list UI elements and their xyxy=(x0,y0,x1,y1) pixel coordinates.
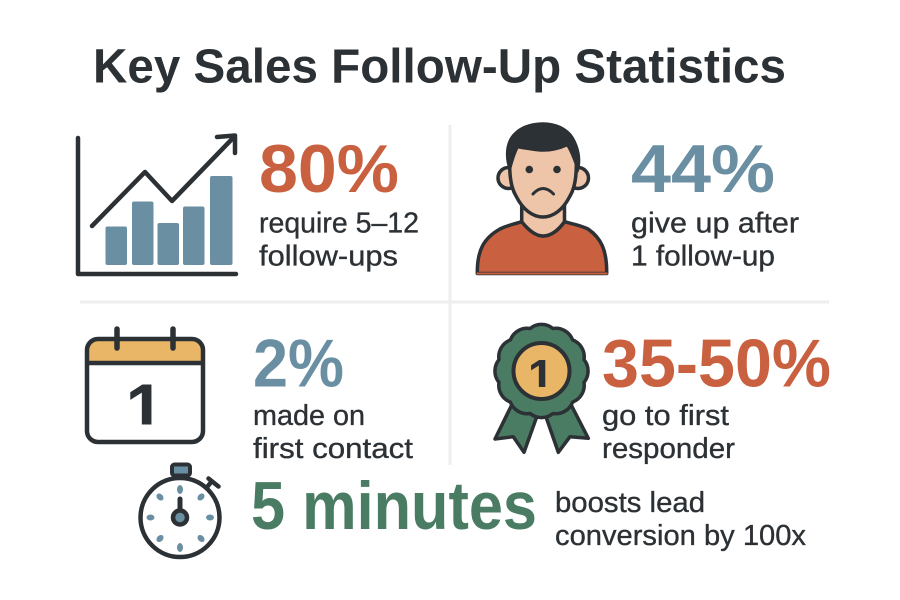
icon: sad person xyxy=(477,123,607,274)
stat: 5 minutes: 5 minutes xyxy=(251,468,537,544)
icon: calendar xyxy=(87,329,203,448)
label: require 5-12 follow-ups: require 5–12 xyxy=(259,208,419,240)
label: boosts lead conversion by 100x: boosts lead xyxy=(555,487,705,519)
label: boosts lead conversion by 100x xyxy=(555,487,806,552)
panel: 5 minutes boosts lead conversion xyxy=(140,464,806,557)
label: made on first contact xyxy=(253,400,413,465)
label: give up after 1 follow-up: give up after xyxy=(631,208,799,240)
icon: award rosette: 1 xyxy=(528,350,554,402)
stat: 35-50%: 35-50% xyxy=(602,326,831,402)
stat: 44%: 44% xyxy=(631,131,775,207)
icon: award rosette xyxy=(495,324,588,452)
label: give up after 1 follow-up: 1 follow-up xyxy=(631,240,775,272)
label: require 5-12 follow-ups: follow-ups xyxy=(259,240,398,272)
label: require 5-12 follow-ups xyxy=(259,208,419,272)
label: boosts lead conversion by 100x: conversion by 100x xyxy=(555,520,806,552)
panel: 80% require follow-ups xyxy=(78,131,419,274)
stat: 80%: 80% xyxy=(259,131,399,207)
icon: calendar: 1 xyxy=(126,370,164,448)
title: Key Sales Follow-Up Statistics xyxy=(93,40,786,94)
icon: stopwatch xyxy=(140,464,220,557)
panel: 35-50% go to first responder xyxy=(495,324,831,465)
label: go to first responder xyxy=(602,400,735,465)
label: made on first contact: first contact xyxy=(253,433,413,465)
stat: 2%: 2% xyxy=(253,326,344,402)
panel: 2% made on first contact xyxy=(87,326,413,465)
label: go to first responder: responder xyxy=(602,433,735,465)
icon: rising bar chart xyxy=(78,136,236,274)
label: made on first contact: made on xyxy=(253,400,365,432)
panel: 44% give up after one follow-up xyxy=(477,123,799,274)
label: give up after 1 follow-up xyxy=(631,208,799,272)
label: go to first responder: go to first xyxy=(602,400,729,432)
